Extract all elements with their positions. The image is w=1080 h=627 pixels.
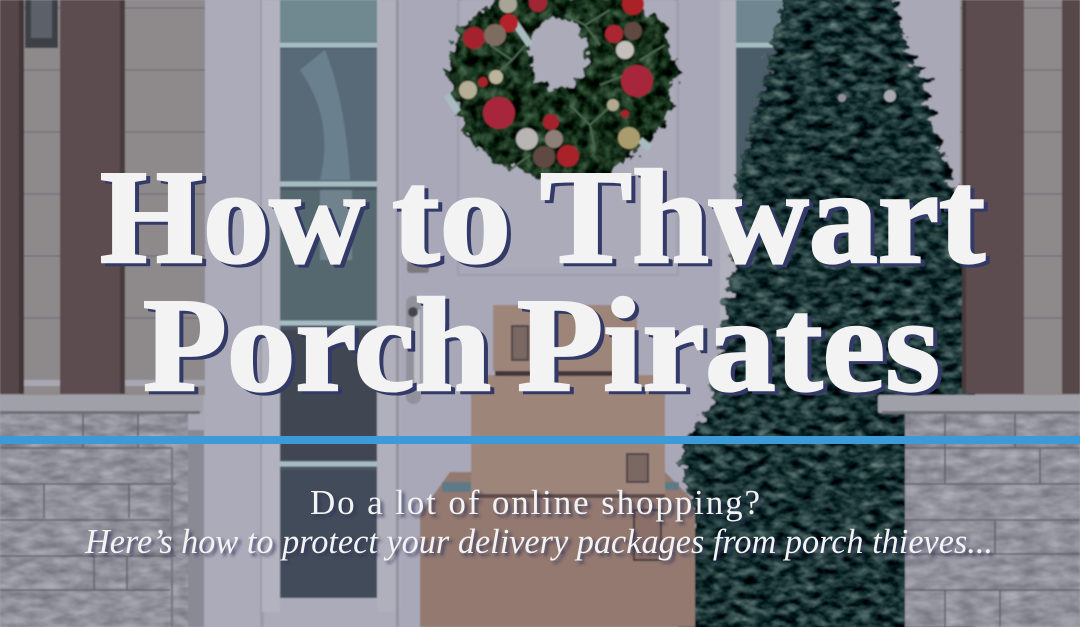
front door: [400, 0, 736, 627]
title shadow: Porch: [147, 274, 495, 422]
title text: How: [100, 143, 365, 291]
middle box: [471, 375, 665, 498]
right stone pillar: [878, 395, 1080, 627]
side window right: [736, 0, 796, 210]
left wooden posts: [0, 0, 125, 394]
left siding: [0, 0, 205, 395]
subtitle shadow: [87, 486, 996, 564]
christmas tree: [675, 0, 975, 627]
red ornaments: [463, 0, 653, 167]
right siding: [960, 0, 1080, 395]
title text: Thwart: [540, 143, 985, 291]
subtitle italic line: Here’s how to protect your delivery packages from porch thieves...: [84, 522, 993, 561]
door handle: [406, 261, 429, 404]
blue divider line: [0, 436, 1080, 444]
subtitle question: Do a lot of online shopping?: [310, 483, 760, 522]
sidelight window: [280, 0, 377, 598]
wreath foliage: [445, 0, 678, 178]
right wooden posts: [962, 0, 1080, 394]
subtitle shadow: Do a lot of online shopping?: [313, 486, 763, 525]
title shadow: Pirates: [521, 274, 944, 422]
title text: Porch: [143, 271, 491, 419]
wreath sprigs: [447, 10, 665, 170]
subtitle: [84, 483, 996, 564]
left stone pillar: [0, 395, 204, 627]
bottom box: [420, 472, 695, 627]
pale ornaments and cones: [459, 0, 642, 168]
stacked delivery boxes: [420, 305, 695, 627]
top box: [493, 305, 637, 376]
porch lamp: [25, 0, 58, 48]
subtitle shadow: Here’s how to protect your delivery packages from porch thieves...: [87, 525, 996, 564]
title: [100, 143, 989, 422]
title text: [100, 143, 985, 419]
title text: to: [392, 143, 511, 291]
title shadow: How: [104, 146, 369, 294]
title text: Pirates: [517, 271, 940, 419]
christmas wreath: [445, 0, 678, 178]
title shadow: Thwart: [544, 146, 989, 294]
title shadow: [104, 146, 989, 422]
title shadow: to: [396, 146, 515, 294]
door frame: [205, 0, 400, 627]
